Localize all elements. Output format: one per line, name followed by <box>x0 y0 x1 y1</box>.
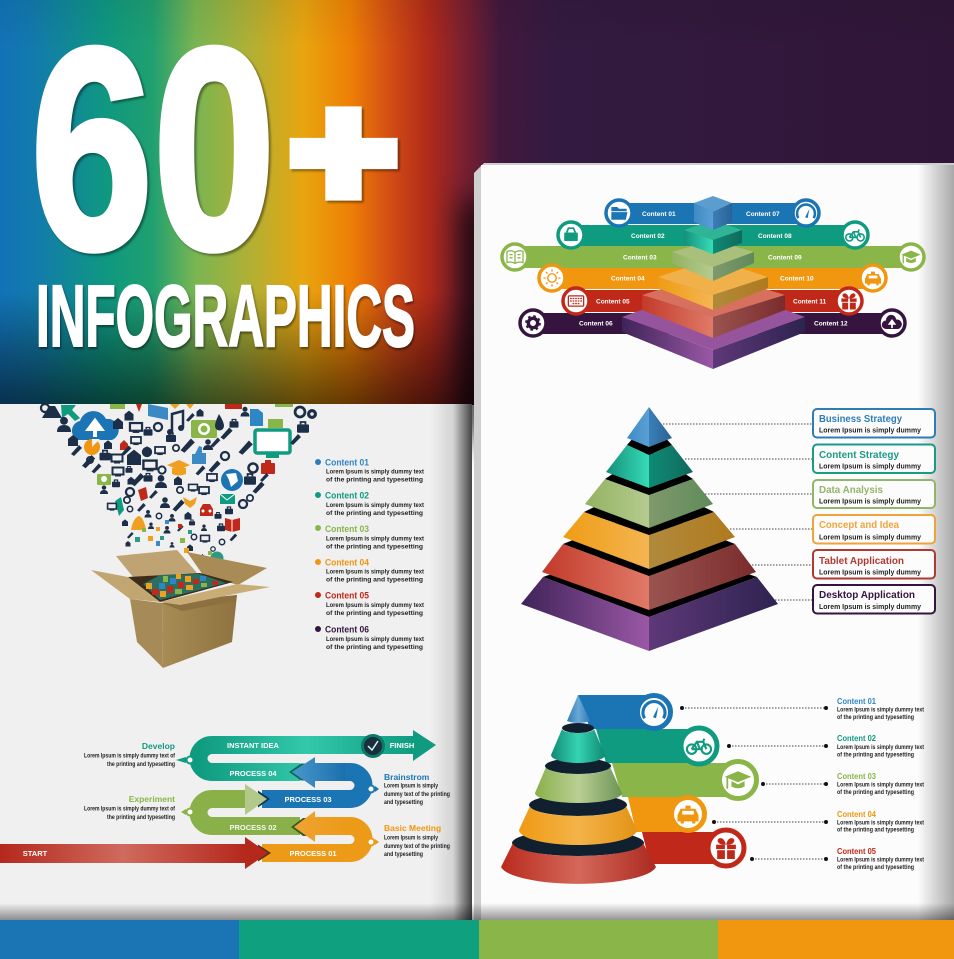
green band: process 02 <box>198 784 300 826</box>
side label: develop <box>84 741 176 768</box>
cone text 03: Lorem Ipsum is simply dummy text <box>837 782 924 788</box>
side label: basic meeting: and typesetting <box>384 852 423 858</box>
bar labels <box>579 211 848 328</box>
legend item 04: Lorem Ipsum is simply dummy text <box>326 568 425 576</box>
red cone tier <box>501 830 656 884</box>
right page <box>0 163 954 920</box>
cone text 04: of the printing and typesetting <box>837 828 914 834</box>
legend item 01 <box>315 458 425 484</box>
bar labels: Content 01 <box>642 211 676 218</box>
back flap <box>116 550 197 577</box>
check circle <box>361 734 385 758</box>
cone text 02: Content 02 <box>837 734 877 743</box>
label text: business strategy: Business Strategy <box>819 413 902 425</box>
legend item 05: of the printing and typesetting <box>326 610 423 617</box>
legend item 03: Content 03 <box>325 524 369 535</box>
bar labels: Content 06 <box>579 320 613 328</box>
label text: content strategy: Lorem Ipsum is simply dummy <box>819 464 921 470</box>
green layer <box>585 450 713 528</box>
green tier <box>672 240 754 281</box>
legend item 02 <box>315 490 425 517</box>
red tier <box>642 273 785 338</box>
interior <box>128 573 233 602</box>
cone text 03 <box>837 772 924 796</box>
legend item 06: Content 06 <box>325 624 369 636</box>
coloured large icons <box>42 404 317 564</box>
label boxes <box>813 409 935 614</box>
legend item 04: Content 04 <box>325 558 370 568</box>
flow labels: PROCESS 01 <box>289 849 337 858</box>
cone pyramid chart <box>501 695 924 884</box>
label text: data analysis <box>819 484 921 506</box>
bar labels: Content 08 <box>758 233 792 240</box>
flow labels: FINISH <box>390 741 414 750</box>
legend item 03 <box>315 524 425 550</box>
label text: tablet application <box>819 555 921 576</box>
red layer <box>542 510 756 610</box>
legend item 06: Lorem Ipsum is simply dummy text <box>326 636 425 643</box>
legend item 01: Lorem Ipsum is simply dummy text <box>326 468 425 476</box>
blue cube <box>694 196 732 230</box>
label text: business strategy <box>819 413 921 434</box>
cone text 02 <box>837 734 924 758</box>
label text: data analysis: Lorem Ipsum is simply dummy <box>819 498 921 506</box>
cone text 05: Content 05 <box>837 847 877 856</box>
orange tier <box>658 259 768 310</box>
flow labels: INSTANT IDEA <box>227 741 280 750</box>
teal layer <box>606 420 693 488</box>
label text: tablet application: Tablet Application <box>819 555 904 567</box>
connector lines <box>660 424 812 600</box>
label text: desktop application <box>819 589 921 611</box>
legend item 06 <box>315 624 425 651</box>
bar labels: Content 05 <box>596 298 630 306</box>
connector lines <box>680 706 828 861</box>
side label: develop: Develop <box>142 741 175 751</box>
cone text 02: of the printing and typesetting <box>837 752 914 758</box>
back right flap <box>187 552 267 585</box>
colourful contents <box>143 574 226 600</box>
side label: experiment: Experiment <box>129 794 175 804</box>
cone text 01: Lorem Ipsum is simply dummy text <box>837 708 924 714</box>
legend item 05: Lorem Ipsum is simply dummy text <box>326 602 425 609</box>
cardboard box <box>91 550 270 668</box>
label text: business strategy: Lorem Ipsum is simply dummy <box>819 428 921 434</box>
side label: brainstrom: Brainstrom <box>384 772 430 782</box>
front flap <box>160 584 270 605</box>
legend item 02: Content 02 <box>325 490 369 502</box>
process flow arrows <box>0 730 450 869</box>
top stepped pyramid chart <box>502 196 924 369</box>
orange layer <box>563 480 735 569</box>
legend item 01: of the printing and typesetting <box>326 476 423 484</box>
flow markers <box>176 756 379 846</box>
legend item 04: of the printing and typesetting <box>326 576 423 584</box>
flow labels: PROCESS 04 <box>229 769 277 778</box>
cone text 01: of the printing and typesetting <box>837 715 914 721</box>
label text: content strategy: Content Strategy <box>819 449 899 461</box>
legend item 05 <box>315 590 425 617</box>
cone text 03: of the printing and typesetting <box>837 790 914 796</box>
flow labels: PROCESS 03 <box>284 795 332 804</box>
bar labels: Content 09 <box>768 254 802 262</box>
side label: brainstrom <box>384 772 450 806</box>
cone text 05: of the printing and typesetting <box>837 865 914 871</box>
teal band: instant idea / process 04 <box>198 730 436 772</box>
header banner background <box>0 0 954 440</box>
label text: desktop application: Lorem Ipsum is simply dummy <box>819 604 921 611</box>
cone text 04: Content 04 <box>837 810 877 819</box>
title: 60+: + <box>290 64 397 240</box>
icon cloud bursting from box <box>41 404 317 564</box>
dark small icons <box>41 404 309 563</box>
flow labels <box>23 741 414 858</box>
orange band: process 01 <box>262 811 364 853</box>
legend item 04 <box>315 558 425 584</box>
cone text 01 <box>837 697 924 721</box>
side label: basic meeting: Basic Meeting <box>384 823 441 833</box>
side label: brainstrom: and typesetting <box>384 800 423 806</box>
blue layer <box>627 407 672 447</box>
side label: brainstrom: Lorem Ipsum is simply <box>384 784 439 790</box>
side label: experiment <box>84 794 176 821</box>
cone text 03: Content 03 <box>837 772 877 781</box>
label text: concept and idea: Concept and Idea <box>819 519 899 531</box>
side label: basic meeting <box>384 823 450 858</box>
red start arrow <box>0 837 271 869</box>
bars and badges <box>578 695 756 866</box>
label text: content strategy <box>819 449 921 470</box>
label text: concept and idea <box>819 519 921 542</box>
legend item 02: Lorem Ipsum is simply dummy text <box>326 502 425 509</box>
middle pyramid chart <box>521 407 935 651</box>
green cone tier <box>535 758 622 803</box>
orange cone tier <box>519 794 637 845</box>
bar labels: Content 03 <box>623 254 657 262</box>
stepped tiers <box>622 196 805 369</box>
blue cone tier <box>567 695 590 723</box>
cone text 02: Lorem Ipsum is simply dummy text <box>837 745 924 751</box>
cone text 05 <box>837 847 924 871</box>
legend item 03: Lorem Ipsum is simply dummy text <box>326 536 425 542</box>
bar labels: Content 04 <box>611 276 645 282</box>
bar labels: Content 11 <box>793 298 827 306</box>
legend item 01: Content 01 <box>325 458 370 468</box>
side label: experiment: Lorem Ipsum is simply dummy text of <box>84 806 176 812</box>
purple layer <box>521 540 778 651</box>
left flap <box>91 570 160 602</box>
bars <box>515 203 911 334</box>
label text: concept and idea: Lorem Ipsum is simply dummy <box>819 534 921 542</box>
side label: basic meeting: Lorem Ipsum is simply <box>384 836 439 842</box>
blue band: process 03 <box>262 757 364 799</box>
legend item 05: Content 05 <box>325 590 370 602</box>
side label: develop: the printing and typesetting <box>107 762 175 768</box>
flow labels: PROCESS 02 <box>229 823 277 832</box>
bar labels: Content 02 <box>631 233 665 240</box>
flow labels: START <box>23 849 48 858</box>
bar labels: Content 10 <box>780 276 814 282</box>
legend item 06: of the printing and typesetting <box>326 644 423 651</box>
label text: data analysis: Data Analysis <box>819 484 883 496</box>
bar labels: Content 07 <box>746 211 780 218</box>
cone text 04 <box>837 810 924 834</box>
teal cone tier <box>551 723 605 763</box>
left page <box>0 404 472 920</box>
cone text 01: Content 01 <box>837 697 877 706</box>
label text: desktop application: Desktop Application <box>819 589 915 601</box>
legend item 02: of the printing and typesetting <box>326 510 423 517</box>
label text: tablet application: Lorem Ipsum is simply dummy <box>819 570 921 576</box>
side label: brainstrom: dummy text of the printing <box>384 792 450 798</box>
subtitle: INFOGRAPHICS: INFOGRAPHICS <box>36 268 415 365</box>
left face <box>130 599 163 668</box>
front face <box>162 595 237 668</box>
teal tier <box>684 220 742 254</box>
circle badges <box>502 200 924 336</box>
cone text 04: Lorem Ipsum is simply dummy text <box>837 820 924 826</box>
bar labels: Content 12 <box>814 320 848 328</box>
badge icons <box>507 205 921 330</box>
legend: content list <box>315 458 425 651</box>
legend item 03: of the printing and typesetting <box>326 544 423 550</box>
bottom colour strip <box>0 920 954 959</box>
small coloured bits <box>135 520 212 555</box>
side label: experiment: the printing and typesetting <box>107 815 175 821</box>
side label: develop: Lorem Ipsum is simply dummy text of <box>84 754 176 760</box>
purple tier <box>622 284 805 369</box>
cone text 05: Lorem Ipsum is simply dummy text <box>837 858 924 864</box>
side label: basic meeting: dummy text of the printing <box>384 844 450 850</box>
